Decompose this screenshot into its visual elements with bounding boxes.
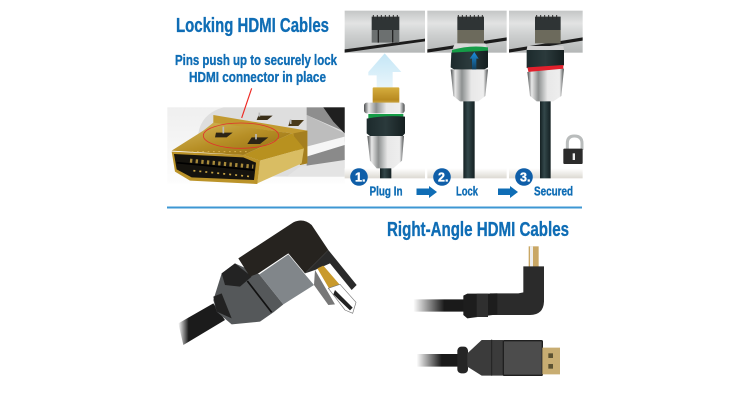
top face xyxy=(172,123,292,155)
illustration: gold HDMI connector close-up xyxy=(167,88,345,184)
red circle and pointer xyxy=(203,123,279,148)
arrow up xyxy=(368,53,401,87)
black angled hood xyxy=(238,221,328,277)
arrow: plug in to lock xyxy=(416,186,437,198)
gold tip xyxy=(317,266,340,290)
step number badges xyxy=(350,168,533,186)
panel: step 1 plug in xyxy=(345,11,425,178)
panel: step 2 lock xyxy=(427,11,507,178)
step number badges: 1. xyxy=(355,170,365,184)
grey panel xyxy=(259,254,314,304)
step number badges: 2. xyxy=(438,170,448,184)
cable xyxy=(178,303,225,345)
icon: padlock xyxy=(563,136,583,164)
small blue arrow xyxy=(470,52,479,69)
photo: angled HDMI plug, large xyxy=(178,221,357,345)
step label: Secured: Secured xyxy=(534,184,573,198)
divider line xyxy=(167,206,582,208)
step number badges: 3. xyxy=(520,170,530,184)
rear flange xyxy=(213,115,307,165)
step label: Plug In: Plug In xyxy=(370,184,403,198)
photo: HDMI cable straight view xyxy=(417,340,560,376)
callout text: pins push up: Pins push up to securely lock xyxy=(175,53,338,69)
mouth xyxy=(172,152,260,184)
step label: Lock: Lock xyxy=(456,184,479,198)
callout text: pins push up: HDMI connector in place xyxy=(189,70,326,86)
right side xyxy=(243,133,304,161)
panel: step 3 secured xyxy=(509,11,583,178)
boot xyxy=(213,263,283,324)
plug xyxy=(364,87,405,178)
lock pins xyxy=(215,133,233,137)
callout text: pins push up xyxy=(175,53,338,86)
title: Locking HDMI Cables: Locking HDMI Cables xyxy=(176,15,329,37)
socket collar xyxy=(305,250,357,290)
arrow: lock to secured xyxy=(498,186,518,198)
title: Right-Angle HDMI Cables: Right-Angle HDMI Cables xyxy=(387,219,569,241)
socket strip xyxy=(345,11,425,53)
photo: right-angle HDMI cable side view xyxy=(413,246,544,318)
